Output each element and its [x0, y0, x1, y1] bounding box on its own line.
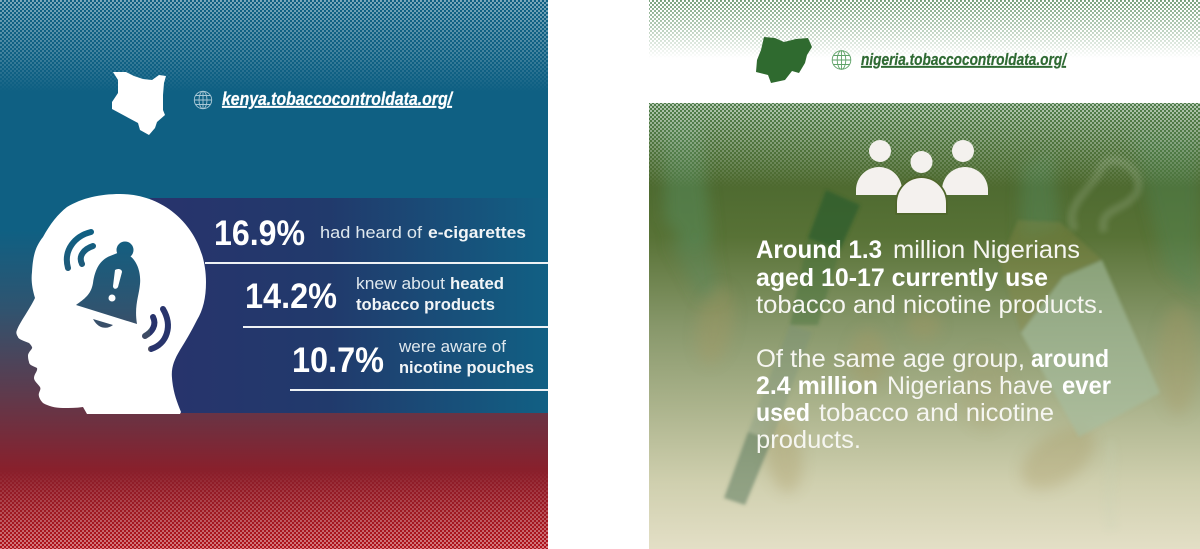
statistic: nicotine pouches: were aware of	[398, 337, 506, 356]
statistic: e-cigarettes: had heard of	[320, 223, 422, 242]
panel: Kenya	[0, 0, 548, 549]
statistic: heated tobacco products: 14.2%	[245, 277, 337, 316]
text block: ever use	[756, 345, 1111, 454]
text block: current use	[756, 236, 1104, 319]
panel: Nigeria photo and statistics	[649, 103, 1200, 549]
text block: ever use: Nigerians have	[887, 372, 1053, 400]
statistic: nicotine pouches	[292, 337, 534, 380]
text block: ever use: around	[1031, 345, 1109, 373]
statistic: e-cigarettes: 16.9%	[214, 214, 305, 253]
text block: ever use: products.	[756, 426, 861, 454]
text block: current use: million Nigerians	[893, 236, 1080, 264]
text block: current use: aged 10-17 currently use	[756, 264, 1048, 292]
text block: ever use: 2.4 million	[756, 372, 878, 400]
text block: ever use: tobacco and nicotine	[819, 399, 1054, 427]
icon: map of Kenya	[112, 72, 166, 135]
Nigeria URL: nigeria.tobaccocontroldata.org/	[861, 50, 1068, 69]
text block: ever use: ever	[1062, 372, 1111, 400]
icon: group of people	[856, 140, 988, 213]
panel: awareness statistics band	[150, 198, 548, 413]
text block: current use: Around 1.3	[756, 236, 882, 264]
statistic: heated tobacco products	[245, 274, 504, 316]
statistic: heated tobacco products: heated	[450, 274, 504, 293]
statistic: heated tobacco products: knew about	[356, 274, 445, 293]
panel: Nigeria header	[649, 0, 1200, 83]
text block: ever use: used	[756, 399, 810, 427]
Kenya URL: kenya.tobaccocontroldata.org/	[222, 88, 454, 109]
icon: globe	[832, 51, 851, 69]
statistic: e-cigarettes: e-cigarettes	[428, 223, 526, 242]
statistic: nicotine pouches: nicotine pouches	[399, 358, 534, 377]
statistic: heated tobacco products: tobacco products	[356, 295, 495, 314]
icon: head with bell	[16, 194, 206, 414]
text block: ever use: Of the same age group,	[756, 345, 1025, 373]
icon: map of Nigeria	[756, 37, 812, 83]
statistic: e-cigarettes	[214, 214, 526, 253]
icon: globe	[194, 91, 212, 109]
text block: current use: tobacco and nicotine products.	[756, 291, 1104, 319]
statistic: nicotine pouches: 10.7%	[292, 341, 384, 380]
photo: hands, e-cigarette, cigarettes and smoke	[662, 120, 1200, 530]
